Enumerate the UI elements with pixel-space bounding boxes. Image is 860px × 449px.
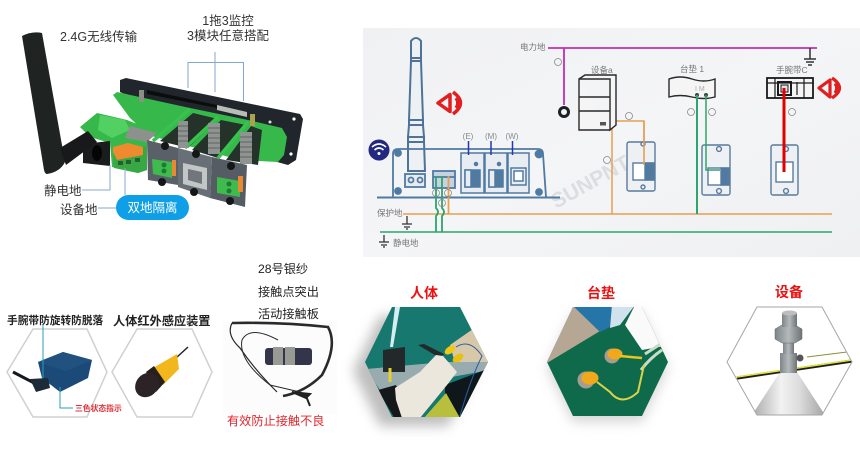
- heading: 人体红外感应装置: [113, 313, 210, 328]
- label: static ground: [44, 165, 110, 198]
- panel: strap anti-rotation sensor: [7, 314, 122, 417]
- three sensor modules: [147, 140, 247, 207]
- module labels: (E): [463, 132, 474, 141]
- heading: wireless transmission: 2.4G无线传输: [60, 29, 138, 44]
- panel: human body: [353, 285, 490, 426]
- power ground line: [520, 42, 817, 105]
- antenna outline: [408, 38, 425, 171]
- icon: yellow sensor: [130, 347, 188, 402]
- wrist strap connector: [767, 65, 813, 98]
- module slot rails: [153, 109, 248, 158]
- panel: wrist strap: [223, 262, 337, 428]
- bracket lines for modules: [188, 52, 244, 101]
- table mat: I M: [695, 86, 705, 93]
- protective ground line: [377, 121, 832, 229]
- icon: red speaker left: [438, 92, 460, 114]
- static ground line: [379, 232, 832, 248]
- features text: [258, 262, 319, 321]
- wires to ground: [436, 176, 448, 232]
- label: device ground: 设备地: [60, 202, 98, 217]
- shadow: [353, 316, 476, 426]
- heading: module combination: [187, 14, 269, 43]
- equipment cabinet: 设备a: [591, 65, 613, 75]
- hex photo: mat snaps: [545, 305, 670, 418]
- module recesses: [160, 113, 262, 165]
- gateway box: [377, 149, 560, 198]
- hex photo: hand on mat: [360, 305, 490, 420]
- strap photo: [223, 322, 337, 414]
- module springs: [178, 121, 252, 164]
- wrist strap connector: 手腕带C: [776, 65, 808, 75]
- static ground line: 静电地: [393, 238, 419, 248]
- icon: wifi badge: [368, 140, 390, 160]
- pill: dual ground isolation: 双地隔离: [127, 200, 178, 215]
- connecting wires: [644, 88, 784, 214]
- shadow: [547, 313, 668, 422]
- icon: blue sensor box: [13, 352, 92, 392]
- panel: wireless device product: [22, 14, 303, 220]
- module labels: [463, 132, 519, 141]
- power ground line: 电力地: [520, 42, 546, 52]
- status indicator label: 三色状态指示: [75, 403, 122, 413]
- pill: dual ground isolation: [116, 195, 189, 220]
- watermark: SUNPNT: [547, 151, 634, 213]
- numbered circles: [432, 58, 796, 206]
- table mat: 台垫 1: [680, 64, 704, 74]
- green circuit board: [113, 92, 287, 162]
- diagram background: [363, 28, 860, 257]
- heading: 台垫: [587, 285, 615, 301]
- modules E M W: [461, 153, 529, 193]
- heading: 人体: [410, 285, 438, 301]
- panel: table mat: [545, 285, 670, 422]
- module labels: (M): [485, 132, 497, 141]
- heading: module combination: 3模块任意搭配: [187, 28, 269, 43]
- left green module with terminals: [80, 113, 157, 173]
- panel: infrared sensor: [112, 313, 212, 417]
- label: device ground: [60, 168, 125, 217]
- warning text: 有效防止接触不良: [227, 413, 324, 428]
- hexagon outline: [7, 329, 107, 417]
- hexagon outline and bolt drawing: [727, 307, 852, 415]
- black connector: [83, 141, 110, 166]
- features text: 接触点突出: [258, 284, 319, 299]
- features text: 活动接触板: [258, 306, 319, 321]
- heading: module combination: 1拖3监控: [202, 14, 254, 28]
- features text: 28号银纱: [258, 262, 308, 276]
- back plate: [120, 78, 303, 165]
- panel: wiring diagram: [363, 28, 860, 257]
- protective ground line: 保护地: [377, 208, 403, 218]
- pointer line: [42, 325, 44, 378]
- heading: 手腕带防旋转防脱落: [7, 314, 104, 327]
- icon: red speaker right: [819, 78, 840, 98]
- socket: [558, 106, 570, 118]
- panel: equipment: [727, 284, 852, 415]
- module plates: [627, 142, 798, 195]
- equipment cabinet: [579, 65, 616, 130]
- antenna: [22, 32, 65, 174]
- hexagon outline: [112, 329, 212, 417]
- heading: 设备: [775, 284, 803, 300]
- label: static ground: 静电地: [44, 184, 82, 198]
- table mat: [669, 64, 715, 98]
- module labels: (W): [506, 132, 519, 141]
